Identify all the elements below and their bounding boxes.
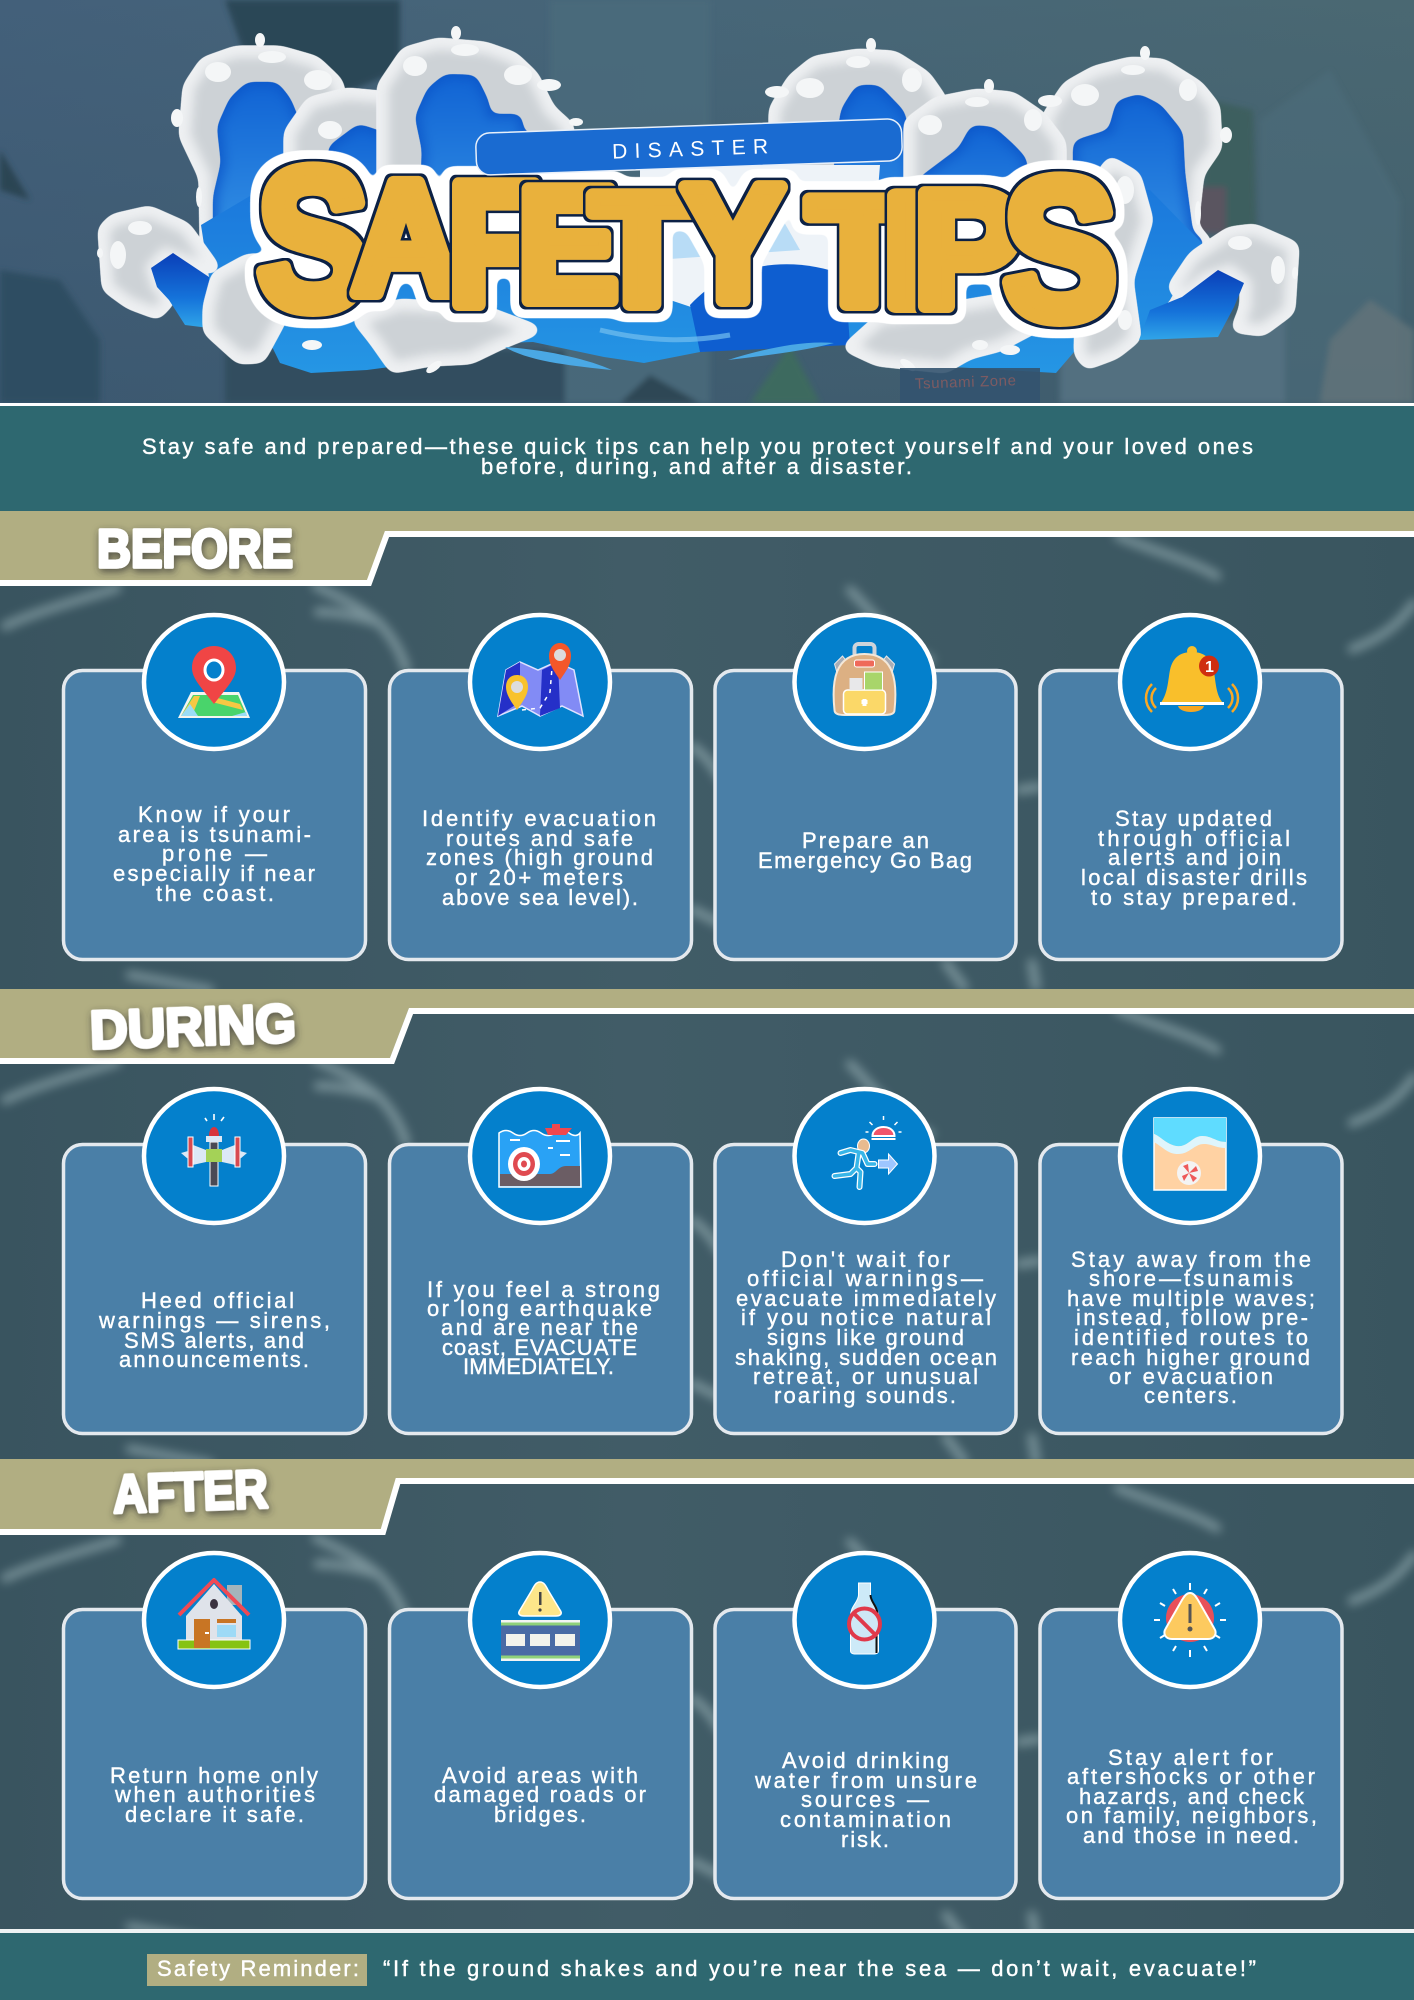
tip text: [434, 1763, 646, 1827]
tip text: Don't wait for: [781, 1247, 950, 1272]
tip text: above sea level).: [442, 885, 638, 910]
tip text: centers.: [1144, 1383, 1237, 1408]
tip text: Heed official: [141, 1288, 294, 1313]
card: official alerts: [1040, 615, 1342, 960]
tip text: and are near the: [441, 1315, 638, 1340]
tip text: especially if near: [113, 861, 315, 886]
tip text: risk.: [841, 1827, 889, 1852]
icon: bottle with prohibition sign: [794, 1553, 934, 1687]
tip text: [735, 1247, 997, 1408]
tip text: coast, EVACUATE: [442, 1335, 637, 1360]
tip text: Stay away from the: [1071, 1247, 1311, 1272]
card: return home: [64, 1553, 366, 1898]
sign: Tsunami Zone: Tsunami Zone: [915, 372, 1016, 393]
icon: alarm bell: [1120, 615, 1260, 749]
tip text: Emergency Go Bag: [758, 848, 972, 873]
section header: AFTER: [0, 1459, 1414, 1532]
tip text: if you notice natural: [741, 1305, 991, 1330]
title: SAFETY TIPS: S: [1003, 138, 1117, 361]
intro band: Stay safe and prepared—these quick tips can help you protect yourself and your loved ones: [142, 434, 1253, 459]
card: go bag: [715, 615, 1016, 960]
title: SAFETY TIPS: E: [518, 155, 618, 335]
tip text: local disaster drills: [1081, 865, 1307, 890]
tip text: bridges.: [494, 1802, 586, 1827]
tip text: alerts and join: [1108, 845, 1281, 870]
tip text: Stay alert for: [1108, 1745, 1273, 1770]
section header: AFTER: AFTER: [112, 1459, 269, 1525]
tip text: zones (high ground: [426, 845, 653, 870]
title artwork: tsunami waves: [97, 26, 1298, 375]
tip text: aftershocks or other: [1067, 1764, 1315, 1789]
tip text: signs like ground: [767, 1325, 964, 1350]
tip text: [98, 1288, 330, 1372]
title: SAFETY TIPS: T: [591, 162, 693, 338]
tip text: [110, 1763, 318, 1827]
card: know your area: [64, 615, 366, 960]
tip text: Return home only: [110, 1763, 318, 1788]
icon: undersea earthquake: [470, 1089, 610, 1223]
section header: BEFORE: [0, 511, 1414, 583]
card: aftershocks: [1040, 1553, 1342, 1898]
tip text: [113, 802, 315, 906]
tip text: Stay updated: [1115, 806, 1272, 831]
title: SAFETY TIPS: T: [808, 167, 910, 337]
tip text: hazards, and check: [1079, 1784, 1305, 1809]
tip text: or 20+ meters: [455, 865, 623, 890]
card: stay away from shore: [1040, 1089, 1342, 1434]
reminder quote: “If the ground shakes and you’re near the sea — don’t wait, evacuate!”: [383, 1956, 1256, 1981]
header background scene: [0, 0, 1414, 403]
divider line under header: [0, 403, 1414, 406]
tip text: and those in need.: [1083, 1823, 1299, 1848]
tip text: on family, neighbors,: [1066, 1803, 1317, 1828]
tip text: evacuate immediately: [736, 1286, 996, 1311]
tip text: warnings — sirens,: [98, 1308, 330, 1333]
section header: DURING: [0, 989, 1414, 1061]
title: SAFETY TIPS: Y: [682, 152, 784, 335]
icon: route map: [470, 615, 610, 749]
tip text: If you feel a strong: [427, 1277, 660, 1302]
tip text: Avoid areas with: [442, 1763, 638, 1788]
icon: siren pole: [144, 1089, 284, 1223]
sign: Tsunami Zone: [900, 368, 1040, 403]
card: official warnings: [64, 1089, 366, 1434]
title: SAFETY TIPS: A: [352, 148, 460, 327]
tip text: area is tsunami-: [118, 822, 311, 847]
tip text: instead, follow pre-: [1076, 1305, 1308, 1330]
section header: DURING: DURING: [89, 993, 297, 1061]
card: unsafe water: [715, 1553, 1016, 1898]
title: SAFETY TIPS: F: [448, 146, 540, 341]
tip text: shore—tsunamis: [1089, 1266, 1293, 1291]
tip text: announcements.: [119, 1347, 309, 1372]
tip text: contamination: [780, 1807, 951, 1832]
tip text: sources —: [801, 1787, 929, 1812]
icon: map pin: [144, 615, 284, 749]
tip text: identified routes to: [1074, 1325, 1308, 1350]
tip text: Avoid drinking: [782, 1748, 949, 1773]
tip text: Know if your: [138, 802, 290, 827]
icon: running person: [794, 1089, 934, 1223]
banner: DISASTER: DISASTER: [612, 135, 768, 164]
tip text: or long earthquake: [427, 1296, 652, 1321]
icon: hazard alert: [1120, 1553, 1260, 1687]
intro band: [0, 406, 1414, 511]
intro band: before, during, and after a disaster.: [481, 454, 912, 479]
title: SAFETY TIPS: P: [914, 158, 1022, 341]
tip text: damaged roads or: [434, 1782, 646, 1807]
title: SAFETY TIPS: I: [882, 161, 942, 341]
tip text: or evacuation: [1109, 1364, 1273, 1389]
icon: beach shore: [1120, 1089, 1260, 1223]
title: SAFETY TIPS: [257, 128, 1117, 361]
tip text: roaring sounds.: [774, 1383, 956, 1408]
tip text: to stay prepared.: [1091, 885, 1297, 910]
tip text: shaking, sudden ocean: [735, 1345, 997, 1370]
tip text: [754, 1748, 977, 1852]
section background: [0, 511, 1414, 1942]
tip text: SMS alerts, and: [124, 1328, 304, 1353]
section header: BEFORE: BEFORE: [97, 519, 293, 579]
tip text: IMMEDIATELY.: [463, 1354, 614, 1379]
tip text: prone —: [162, 841, 267, 866]
divider line above footer: [0, 1929, 1414, 1933]
icon: house: [144, 1553, 284, 1687]
tips row: after: [64, 1553, 1342, 1898]
tip text: [1066, 1745, 1317, 1848]
tip text: routes and safe: [446, 826, 633, 851]
tip text: [1081, 806, 1307, 910]
tip text: [422, 806, 656, 910]
icon: alarm bell: 1: [1205, 659, 1214, 676]
card: natural signs: [715, 1089, 1016, 1434]
tips row: during: [64, 1089, 1342, 1434]
tip text: water from unsure: [754, 1768, 977, 1793]
tips row: before: [64, 615, 1342, 960]
card: damaged roads: [390, 1553, 692, 1898]
icon: backpack: [794, 615, 934, 749]
card: earthquake near coast: [390, 1089, 692, 1434]
reminder label: Safety Reminder:: [157, 1956, 359, 1981]
tip text: reach higher ground: [1071, 1345, 1310, 1370]
tip text: retreat, or unusual: [753, 1364, 978, 1389]
icon: damaged road warning: [470, 1553, 610, 1687]
footer: safety reminder: [0, 1933, 1414, 2000]
tip text: official warnings—: [747, 1266, 983, 1291]
tip text: [1067, 1247, 1315, 1408]
card: evacuation routes: [390, 615, 692, 960]
tip text: Prepare an: [802, 828, 929, 853]
banner: DISASTER: [475, 119, 903, 175]
tip text: [758, 828, 972, 873]
tip text: the coast.: [156, 881, 274, 906]
tip text: [427, 1277, 660, 1379]
tip text: Identify evacuation: [422, 806, 656, 831]
title: SAFETY TIPS: S: [257, 128, 369, 351]
tip text: declare it safe.: [125, 1802, 304, 1827]
tip text: when authorities: [114, 1782, 315, 1807]
tip text: through official: [1098, 826, 1290, 851]
tip text: have multiple waves;: [1067, 1286, 1315, 1311]
